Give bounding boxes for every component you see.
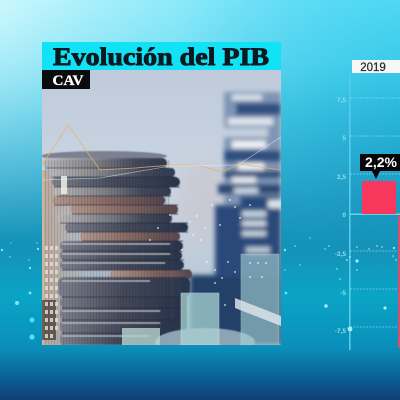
white highlight marks — [61, 176, 67, 194]
bar next year, negative — [398, 215, 400, 348]
data sparkles on photo — [149, 199, 267, 306]
white line overlay — [42, 137, 281, 180]
y axis labels: 0 — [342, 212, 346, 219]
title banner: Evolución del PIB — [53, 44, 269, 71]
orange line chart overlay — [42, 125, 281, 172]
region tag: CAV — [42, 70, 90, 89]
y axis labels: 5 — [342, 135, 346, 142]
gridlines — [350, 98, 400, 327]
y axis labels: -2,5 — [335, 251, 346, 258]
warm haze in the middle — [179, 164, 223, 232]
panel: photo of coin stacks — [41, 70, 281, 356]
region tag: CAV: CAV — [52, 73, 84, 89]
main coin stack — [41, 151, 192, 345]
y axis labels: 7,5 — [337, 97, 346, 104]
callout 2,2%: 2,2% — [365, 154, 398, 170]
y axis labels: -7,5 — [335, 328, 346, 335]
bar 2019: 2,2% — [362, 181, 396, 214]
chart particles — [324, 245, 397, 331]
y axis labels: -5 — [340, 290, 346, 297]
data-dot grid on left edge — [45, 246, 58, 338]
y axis — [349, 73, 351, 350]
translucent overlay bars — [122, 254, 279, 345]
chart: PIB 2019 — [324, 60, 400, 350]
coin at lower right of photo — [155, 328, 256, 345]
dark patch behind dot grid — [42, 300, 56, 340]
diagonal coin edge — [235, 298, 281, 326]
particles around the photo — [1, 237, 311, 340]
callout 2,2% — [360, 154, 400, 179]
year label 2019 — [352, 60, 400, 74]
y axis labels — [335, 97, 346, 335]
blurred background coin stack — [190, 92, 281, 345]
zero baseline — [350, 214, 400, 215]
year label 2019: 2019 — [360, 62, 386, 74]
y axis labels: 2,5 — [337, 174, 346, 181]
